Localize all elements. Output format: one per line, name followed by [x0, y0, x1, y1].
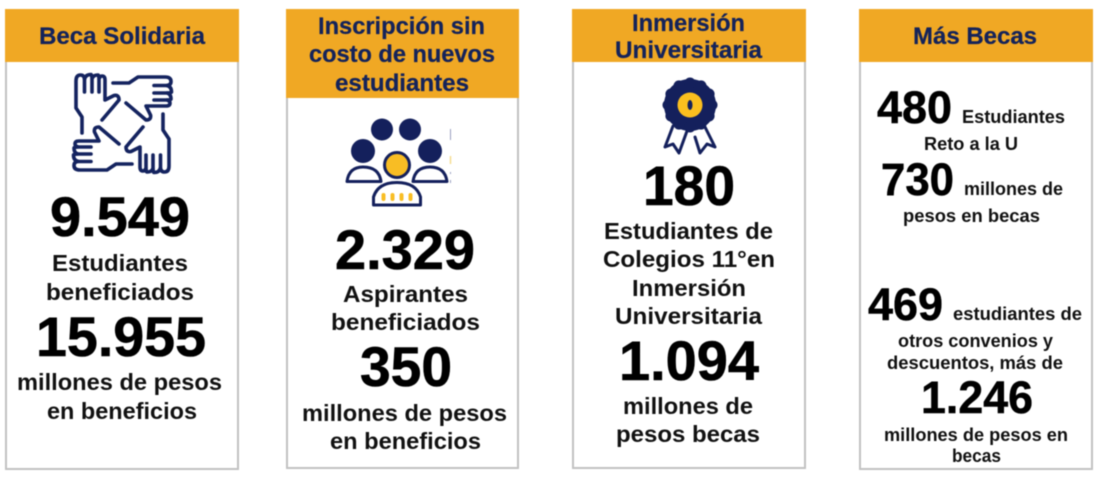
number: 469: 469: [868, 279, 943, 330]
text: Estudiantes de Colegios 11° en Inmersión Universitaria: Colegios 11°en: [603, 246, 775, 272]
text: millones de pesos en beneficios: [17, 369, 222, 424]
text: millones de pesos becas: [616, 393, 760, 447]
text: millones de pesos en beneficios: [302, 400, 507, 454]
heading: Inmersión Universitaria: Inmersión: [632, 10, 745, 37]
text: millones de pesos en beneficios: en beneficios: [47, 398, 197, 424]
text: millones de pesos en becas: becas: [952, 446, 1001, 466]
panel: Beca Solidaria: [5, 9, 239, 469]
text: Estudiantes Reto a la U: [924, 107, 1065, 154]
number: 480: 480: [877, 82, 952, 133]
text: Aspirantes beneficiados: [331, 281, 480, 335]
icon: four joined hands: [74, 74, 172, 172]
text: Estudiantes Reto a la U: Reto a la U: [924, 134, 1018, 154]
number: 9.549 students: 9.549: [50, 185, 190, 248]
number: 180: 180: [643, 154, 735, 217]
text: Aspirantes beneficiados: beneficiados: [331, 309, 480, 335]
icon: group of people: [347, 118, 450, 205]
text: millones de pesos becas: millones de: [623, 393, 753, 419]
text: Estudiantes beneficiados: [46, 250, 194, 305]
panel: Más Becas: [859, 9, 1093, 469]
heading: Más Becas: Más Becas: [913, 23, 1037, 50]
heading: Inscripción sin costo de nuevos estudiantes: [309, 13, 495, 97]
panel: Inscripción sin costo: [286, 9, 519, 468]
text: estudiantes de otros convenios y descuentos, más de: descuentos, más de: [887, 353, 1063, 373]
text: millones de pesos en beneficios: millones de pesos: [302, 400, 507, 426]
text: millones de pesos en beneficios: en beneficios: [330, 428, 481, 454]
text: millones de pesos en becas: [903, 179, 1063, 226]
text: estudiantes de otros convenios y descuentos, más de: [887, 304, 1082, 373]
heading: Inscripción sin costo de nuevos estudiantes: Inscripción sin: [318, 13, 485, 40]
heading: Inmersión Universitaria: [615, 10, 763, 64]
text: estudiantes de otros convenios y descuentos, más de: estudiantes de: [953, 304, 1082, 324]
heading: Inscripción sin costo de nuevos estudiantes: estudiantes: [335, 70, 469, 97]
text: millones de pesos en becas: millones de: [964, 179, 1063, 199]
number: 1.246: 1.246: [921, 372, 1033, 423]
text: millones de pesos en becas: pesos en becas: [903, 206, 1040, 226]
icon: award ribbon: [662, 78, 718, 153]
heading: Inscripción sin costo de nuevos estudiantes: costo de nuevos: [309, 41, 495, 68]
heading: Beca Solidaria: Beca Solidaria: [39, 23, 206, 50]
text: millones de pesos en becas: [884, 425, 1068, 466]
text: Estudiantes de Colegios 11° en Inmersión Universitaria: [603, 218, 775, 329]
text: millones de pesos en beneficios: millones de pesos: [17, 369, 222, 395]
text: Aspirantes beneficiados: Aspirantes: [343, 281, 468, 307]
text: Estudiantes Reto a la U: Estudiantes: [962, 107, 1065, 127]
text: Estudiantes beneficiados: beneficiados: [46, 279, 194, 305]
text: estudiantes de otros convenios y descuentos, más de: otros convenios y: [898, 331, 1053, 351]
number: 730: 730: [881, 154, 954, 205]
text: Estudiantes de Colegios 11° en Inmersión Universitaria: Estudiantes de: [604, 218, 773, 244]
text: millones de pesos en becas: millones de pesos en: [884, 425, 1068, 445]
number: 15.955: 15.955: [36, 305, 206, 368]
number: 2.329: 2.329: [335, 218, 475, 281]
heading: Inmersión Universitaria: Universitaria: [615, 37, 763, 64]
panel: Inmersión Universitaria: [572, 9, 806, 468]
text: Estudiantes beneficiados: Estudiantes: [52, 250, 188, 276]
text: Estudiantes de Colegios 11° en Inmersión Universitaria: Universitaria: [615, 303, 762, 329]
number: 1.094: 1.094: [619, 329, 759, 392]
number: 350: 350: [360, 335, 452, 398]
text: Estudiantes de Colegios 11° en Inmersión Universitaria: Inmersión: [632, 275, 746, 301]
text: millones de pesos becas: pesos becas: [616, 421, 760, 447]
